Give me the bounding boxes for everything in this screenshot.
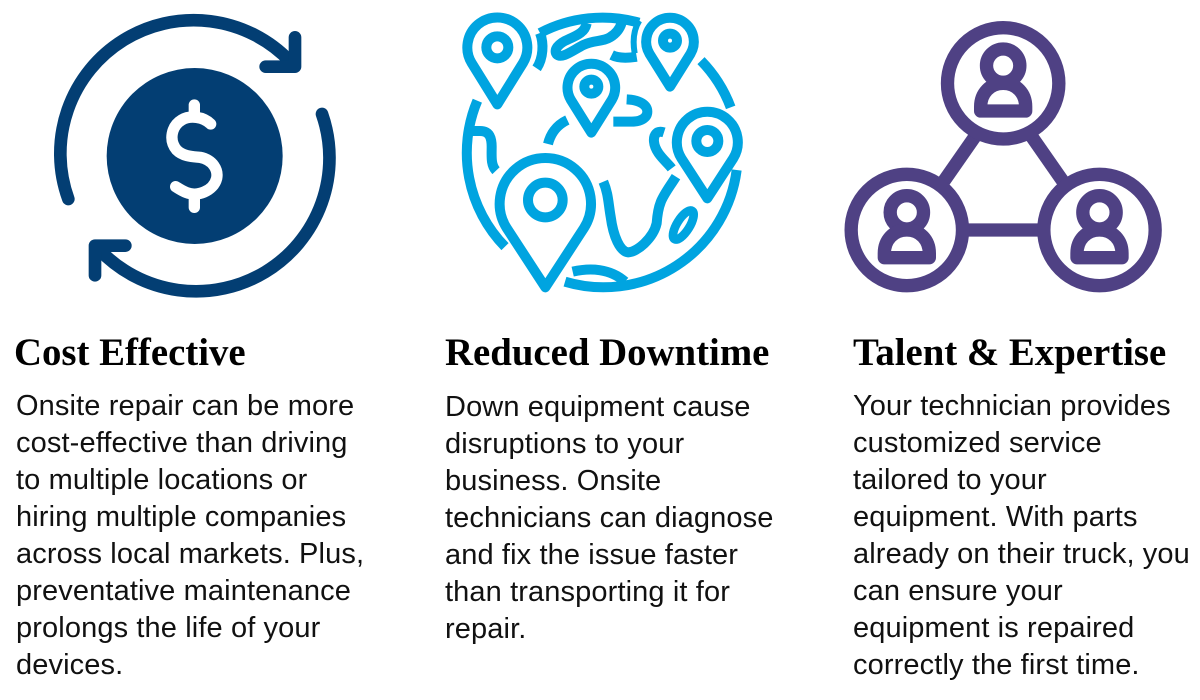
text: cost effective body: prolongs the life of your bbox=[16, 612, 320, 644]
text: cost effective body: cost-effective than driving bbox=[16, 427, 348, 459]
connectors bbox=[940, 132, 1067, 230]
icon: cost cycle with dollar coin bbox=[60, 20, 329, 291]
pin: right bbox=[677, 112, 738, 198]
person node: right bbox=[1044, 174, 1155, 286]
text: talent and expertise body: Your technician provides bbox=[853, 390, 1171, 422]
heading: Cost Effective: Cost Effective bbox=[14, 331, 246, 374]
text: talent and expertise body: equipment is repaired bbox=[853, 612, 1134, 644]
person node: left bbox=[851, 174, 962, 286]
text: reduced downtime body: than transporting it for bbox=[445, 576, 730, 608]
text: reduced downtime body: Down equipment cause bbox=[445, 391, 750, 423]
text: cost effective body: across local markets. Plus, bbox=[16, 538, 364, 570]
coin bbox=[107, 68, 283, 244]
text: talent and expertise body: already on their truck, you bbox=[853, 538, 1190, 570]
text: reduced downtime body: and fix the issue faster bbox=[445, 539, 738, 571]
text: talent and expertise body: equipment. With parts bbox=[853, 501, 1138, 533]
text: cost effective body: hiring multiple companies bbox=[16, 501, 346, 533]
text: cost effective body: Onsite repair can be more bbox=[16, 390, 354, 422]
globe outline and continents bbox=[467, 18, 737, 287]
text: reduced downtime body: disruptions to your bbox=[445, 428, 684, 460]
text: reduced downtime body: technicians can diagnose bbox=[445, 502, 774, 534]
text: reduced downtime body: business. Onsite bbox=[445, 465, 661, 497]
text: cost effective body bbox=[16, 390, 364, 681]
cycle arrow: top bbox=[60, 20, 295, 199]
pin: large bottom left bbox=[500, 158, 591, 287]
pin: middle bbox=[567, 64, 615, 133]
cycle arrow: bottom bbox=[95, 114, 329, 291]
text: talent and expertise body: can ensure your bbox=[853, 575, 1063, 607]
text: reduced downtime body: repair. bbox=[445, 613, 526, 645]
text: talent and expertise body: correctly the first time. bbox=[853, 649, 1140, 681]
text: talent and expertise body: customized service bbox=[853, 427, 1102, 459]
person node: top bbox=[947, 28, 1059, 139]
icon: connected talent network bbox=[851, 28, 1155, 286]
text: talent and expertise body: tailored to your bbox=[853, 464, 1047, 496]
text: cost effective body: preventative maintenance bbox=[16, 575, 351, 607]
pin: top right bbox=[646, 18, 694, 87]
dollar sign bbox=[172, 105, 217, 207]
pin: top left bbox=[467, 17, 527, 104]
text: cost effective body: to multiple locations or bbox=[16, 464, 307, 496]
icon: globe with location pins bbox=[467, 17, 738, 287]
heading: Talent & Expertise: Talent & Expertise bbox=[853, 331, 1166, 374]
text: cost effective body: devices. bbox=[16, 649, 123, 681]
heading: Reduced Downtime: Reduced Downtime bbox=[445, 331, 769, 374]
text: talent and expertise body bbox=[853, 390, 1190, 681]
text: reduced downtime body bbox=[445, 391, 774, 645]
